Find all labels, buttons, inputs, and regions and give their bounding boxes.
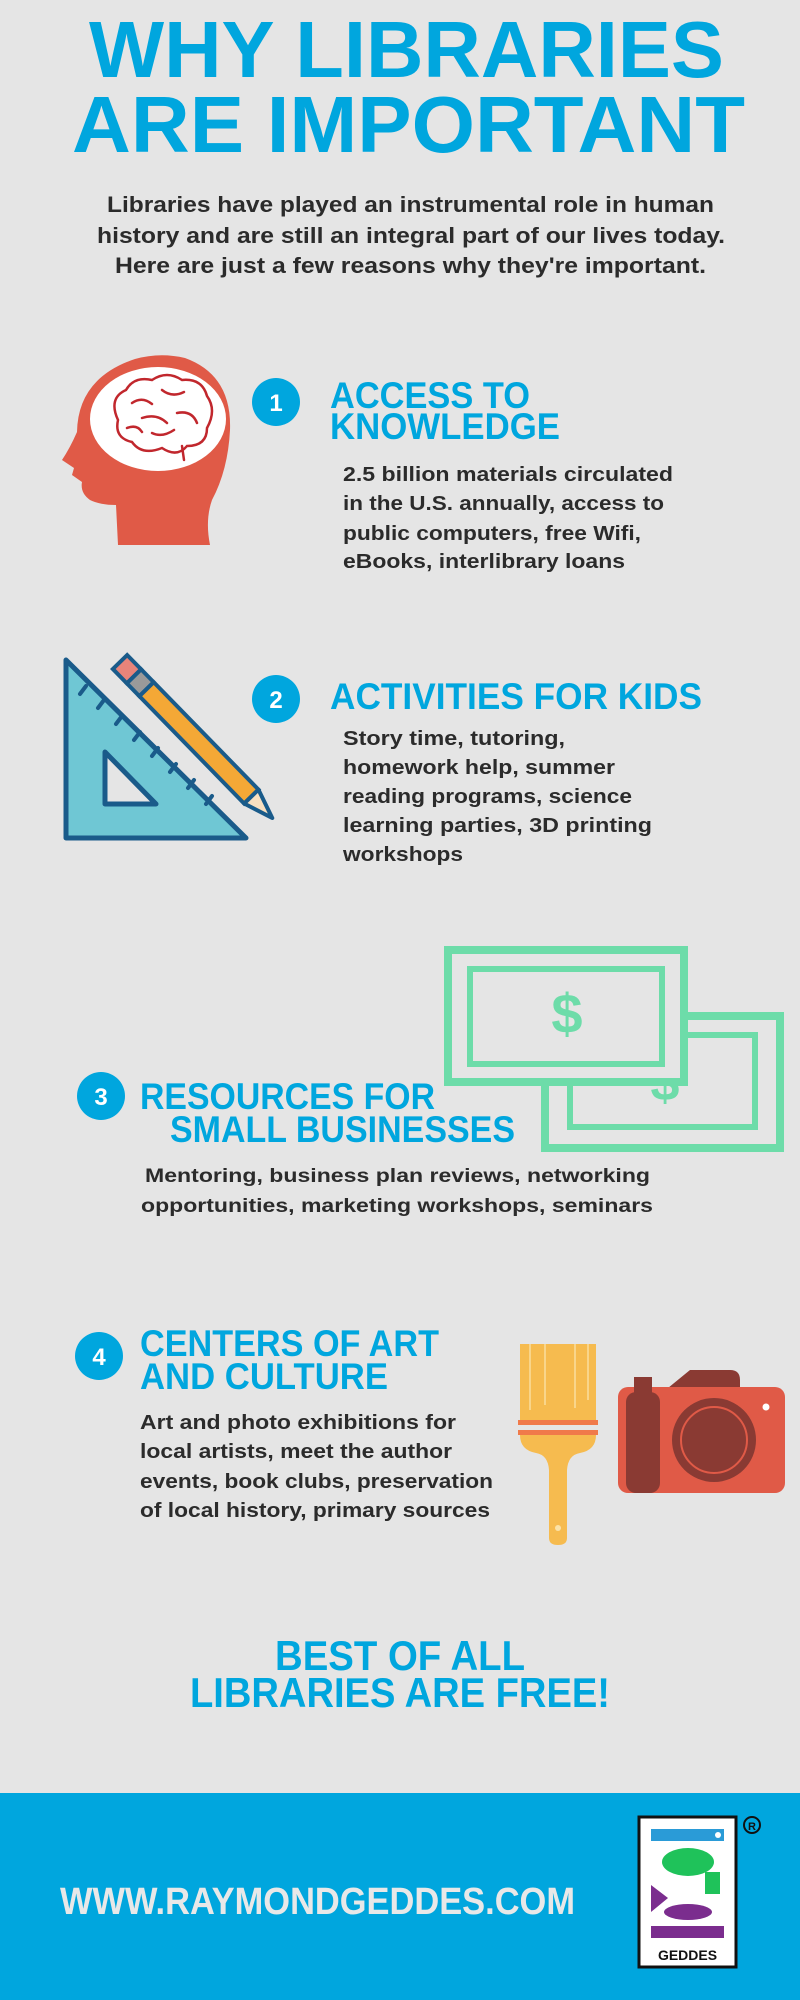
body text 2: homework help, summer <box>343 757 615 779</box>
panel: activities for kids <box>66 655 702 866</box>
icon: money bills: $ <box>651 1054 680 1112</box>
body text 2: reading programs, science <box>343 786 632 808</box>
icon: money bills <box>448 950 780 1148</box>
number badge 1 <box>252 378 300 426</box>
body text 3: Mentoring, business plan reviews, networking <box>145 1166 650 1187</box>
heading: access to knowledge: KNOWLEDGE <box>330 406 560 447</box>
callout: best of all libraries are free: BEST OF ALL <box>275 1632 525 1679</box>
registered mark <box>744 1817 760 1833</box>
body text 1: eBooks, interlibrary loans <box>343 551 625 573</box>
number badge 3: 3 <box>94 1084 108 1111</box>
number badge 2: 2 <box>269 687 283 714</box>
callout: best of all libraries are free: LIBRARIES ARE FREE! <box>190 1669 610 1716</box>
body text 4: of local history, primary sources <box>140 1500 490 1522</box>
heading: centers of art: CENTERS OF ART <box>140 1323 439 1364</box>
icon: camera <box>618 1370 785 1493</box>
body text 4: local artists, meet the author <box>140 1441 452 1463</box>
panel: centers of art and culture <box>75 1323 785 1545</box>
title: ARE IMPORTANT <box>72 80 745 169</box>
title: WHY LIBRARIES <box>89 5 724 94</box>
number badge 4: 4 <box>92 1344 106 1371</box>
heading: resources for small businesses: SMALL BUSINESSES <box>170 1109 515 1150</box>
logo: geddes: GEDDES <box>658 1947 717 1963</box>
number badge 2 <box>252 675 300 723</box>
icon: paintbrush <box>518 1344 598 1545</box>
body text 1: 2.5 billion materials circulated <box>343 464 673 486</box>
body text 2: Story time, tutoring, <box>343 728 565 750</box>
heading: centers of art: AND CULTURE <box>140 1356 388 1397</box>
footer <box>0 1793 800 2000</box>
number badge 1: 1 <box>269 390 283 417</box>
body text 3: opportunities, marketing workshops, seminars <box>141 1196 653 1217</box>
panel: resources for small businesses <box>77 950 780 1217</box>
heading: access to knowledge <box>330 375 560 447</box>
heading: activities for kids: ACTIVITIES FOR KIDS <box>330 676 702 717</box>
heading: resources for small businesses <box>140 1076 515 1150</box>
body text 3 <box>141 1166 653 1217</box>
heading: access to knowledge: ACCESS TO <box>330 375 530 416</box>
title <box>72 5 745 169</box>
intro text <box>97 192 725 278</box>
number badge 3 <box>77 1072 125 1120</box>
icon: head with brain <box>62 355 230 545</box>
body text 4 <box>140 1412 493 1522</box>
logo: geddes <box>639 1817 736 1967</box>
intro text: Libraries have played an instrumental role in human <box>107 192 714 217</box>
body text 1 <box>343 464 673 573</box>
body text 1: in the U.S. annually, access to <box>343 493 664 515</box>
registered mark: R <box>748 1821 756 1833</box>
body text 1: public computers, free Wifi, <box>343 523 641 545</box>
body text 4: Art and photo exhibitions for <box>140 1412 456 1434</box>
heading: centers of art <box>140 1323 439 1397</box>
body text 4: events, book clubs, preservation <box>140 1471 493 1493</box>
footer url: WWW.RAYMONDGEDDES.COM <box>60 1881 575 1923</box>
body text 2: workshops <box>342 844 463 866</box>
callout: best of all libraries are free <box>190 1632 610 1716</box>
panel: access to knowledge <box>62 355 673 573</box>
icon: set square and pencil <box>66 655 279 838</box>
icon: money bills: $ <box>551 982 583 1045</box>
body text 2: learning parties, 3D printing <box>343 815 652 837</box>
intro text: history and are still an integral part of our lives today. <box>97 223 725 248</box>
heading: resources for small businesses: RESOURCES FOR <box>140 1076 435 1117</box>
number badge 4 <box>75 1332 123 1380</box>
body text 2 <box>342 728 652 866</box>
intro text: Here are just a few reasons why they're important. <box>115 253 706 278</box>
